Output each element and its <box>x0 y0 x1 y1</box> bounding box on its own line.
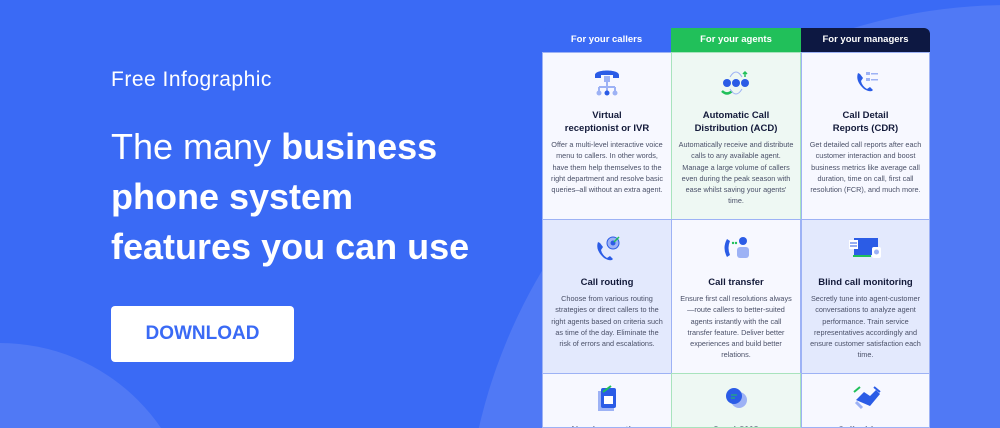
header: callers: For your callers <box>571 34 642 45</box>
cell: transfer <box>671 219 801 374</box>
download button: DOWNLOAD <box>146 323 259 344</box>
cell: CDR: Call Detail <box>843 110 888 121</box>
header: agents: For your agents <box>700 34 772 45</box>
title <box>111 126 469 267</box>
download button <box>111 306 294 362</box>
cell: ACD: Automatic Call <box>703 110 769 121</box>
cell: IVR <box>542 52 672 220</box>
cell: ACD <box>671 52 801 220</box>
cell: CDR: Get detailed call reports after each customer interaction and boost business metrics like average call duration, time on call, first call resolution (FCR), and much more. <box>810 140 921 194</box>
title: features you can use <box>111 226 469 267</box>
cell: monitoring <box>801 219 930 374</box>
cell: monitoring: Blind call monitoring <box>818 277 913 288</box>
cell: monitoring: Secretly tune into agent-customer conversations to analyze agent performance. Train service representatives accordingly and ensure customer satisfaction each time. <box>810 294 921 359</box>
cell: IVR: receptionist or IVR <box>565 123 649 134</box>
header: agents <box>671 28 801 52</box>
header: callers <box>542 28 671 52</box>
cell: send sms <box>671 373 801 428</box>
cell: IVR: Virtual <box>592 110 622 121</box>
cell: routing: Call routing <box>581 277 633 288</box>
cell: transfer: Call transfer <box>708 277 764 288</box>
cell: whisper <box>801 373 930 428</box>
cell: IVR: Offer a multi-level interactive voice menu to callers. In other words, have them help themselves to the right department and resolve basic queries–all without an extra agent. <box>551 140 663 194</box>
cell: ACD: Distribution (ACD) <box>695 123 777 134</box>
header: managers <box>801 28 930 52</box>
cell: transfer: Ensure first call resolutions always—route callers to better-suited agents instantly with the call transfer feature. Deliver better experiences and build better relations. <box>680 294 792 359</box>
header: managers: For your managers <box>822 34 909 45</box>
cell: number porting <box>542 373 672 428</box>
title: The many business <box>111 126 437 167</box>
cell: routing: Choose from various routing strategies or direct callers to the right agents based on criteria such as time of the day. Eliminate the risk of errors and escalations. <box>551 294 663 348</box>
cell: CDR: Reports (CDR) <box>833 123 898 134</box>
cell: CDR <box>801 52 930 220</box>
eyebrow: Free Infographic <box>111 68 272 91</box>
title: phone system <box>111 176 353 217</box>
cell: routing <box>542 219 672 374</box>
cell: ACD: Automatically receive and distribute calls to any available agent. Manage a large volume of callers even during the peak season with ease whilst saving your agents' time. <box>679 140 793 205</box>
